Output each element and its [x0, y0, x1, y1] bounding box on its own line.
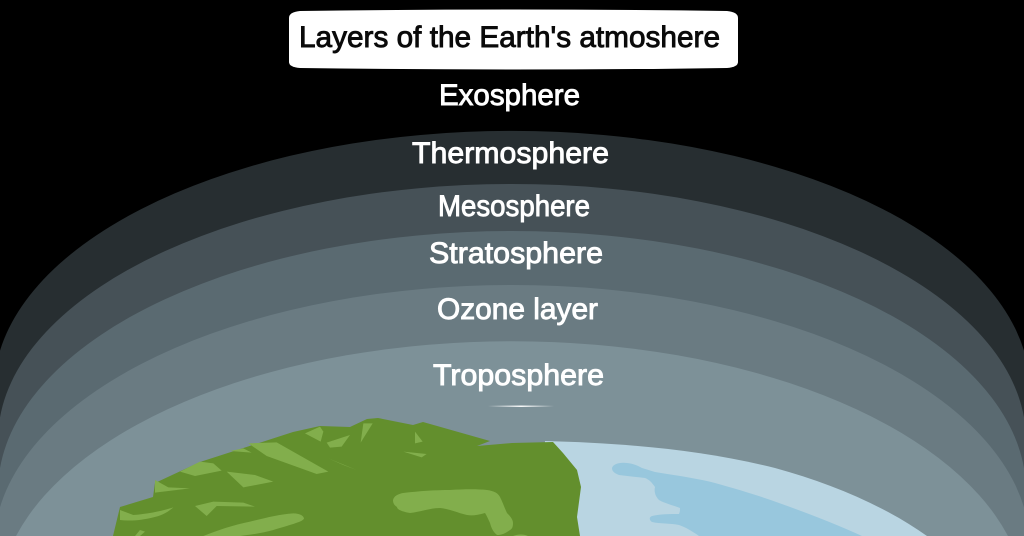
title box — [289, 10, 738, 70]
band: stratosphere — [0, 231, 1024, 536]
label: Stratosphere: Stratosphere — [429, 237, 603, 270]
label: Thermosphere: Thermosphere — [412, 137, 609, 170]
label: Mesosphere: Mesosphere — [438, 190, 590, 223]
title: Layers of the Earth's atmoshere — [299, 21, 720, 54]
earth: ocean — [540, 441, 927, 536]
earth: light green patches — [120, 423, 528, 536]
band: mesosphere — [0, 184, 1024, 536]
earth: deep water — [612, 463, 862, 536]
label: Exosphere: Exosphere — [439, 79, 580, 112]
band: thermosphere — [0, 131, 1024, 536]
highlight line — [488, 406, 554, 407]
band: ozone layer — [0, 285, 1024, 536]
label: Troposphere: Troposphere — [433, 359, 604, 392]
earth: green land — [113, 418, 581, 536]
band: troposphere — [16, 341, 1008, 536]
label: Ozone layer: Ozone layer — [437, 293, 598, 326]
